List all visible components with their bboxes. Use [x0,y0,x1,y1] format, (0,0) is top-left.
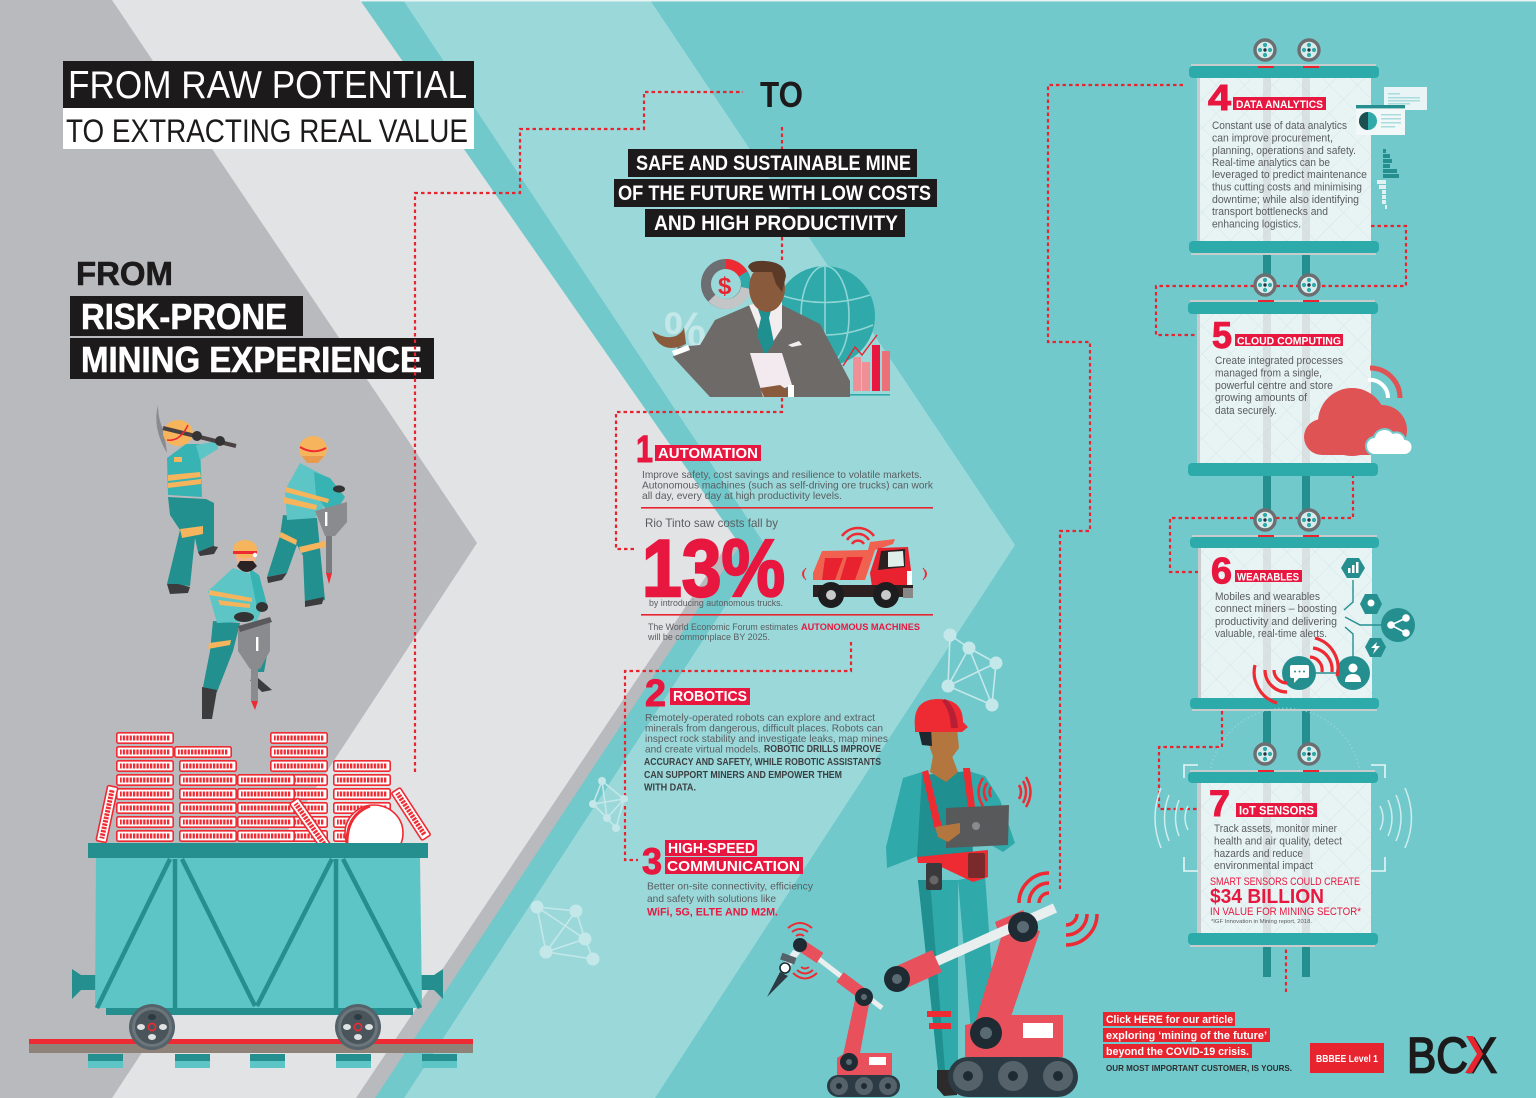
panel 4: data analytics: thus cutting costs and minimising [1212,182,1362,194]
heading: to: TO [760,74,803,115]
section 2: robotics [644,673,888,794]
globe [775,266,875,366]
icon: connected wearables network [1254,558,1415,703]
rail [29,1039,473,1068]
ingot pile [96,733,431,861]
heading: from risk-prone mining experience [70,255,434,380]
badge: BBBEE level 1 [1310,1043,1384,1073]
section 2: robotics: inspect rock stability and investigate leaks, map mines [645,733,888,745]
footer: article link: beyond the COVID-19 crisis. [1106,1046,1249,1058]
section 1: automation: by introducing autonomous trucks. [649,598,783,608]
footer: article link: OUR MOST IMPORTANT CUSTOMER, IS YOURS. [1106,1063,1292,1073]
icon: miner with jackhammer, back [267,436,347,607]
section 2: robotics: Remotely-operated robots can explore and extract [645,712,875,724]
panel 4: data analytics: planning, operations and safety. [1212,145,1356,157]
heading: from risk-prone mining experience: FROM [76,255,173,292]
panel 4: data analytics: enhancing logistics. [1212,218,1301,230]
panel 6: wearables: Mobiles and wearables [1215,591,1320,603]
heading: safe and sustainable mine of the future: SAFE AND SUSTAINABLE MINE [636,152,911,175]
donut chart: $ [718,273,732,300]
panel 7: IoT sensors: IN VALUE FOR MINING SECTOR* [1210,906,1362,918]
section 1: automation: Rio Tinto saw costs fall by [645,516,778,530]
section 2: robotics: and create virtual models. [645,744,761,756]
panel 5: cloud computing: growing amounts of [1215,392,1308,404]
title: from raw potential to extracting real value: TO EXTRACTING REAL VALUE [66,113,468,149]
icon: businessman with globe, chart and donut [652,261,890,397]
panel 5: cloud computing: data securely. [1215,405,1277,417]
icon: analytics cards and bars [1356,87,1427,209]
man [652,261,850,397]
icon: miner with pickaxe [156,405,236,594]
panel 4: data analytics: leveraged to predict maintenance [1212,169,1367,181]
ore wagon with ingots [29,733,473,1068]
section 3: high-speed communication: COMMUNICATION [667,858,800,875]
wagon wheels [129,1004,381,1050]
badge: BBBEE level 1: BBBEE Level 1 [1316,1054,1378,1065]
section 2: robotics: CAN SUPPORT MINERS AND EMPOWER THEM [644,769,842,781]
icon: autonomous dump truck [802,528,926,608]
dashed connector lines [415,85,1406,995]
panel 5: cloud computing: 5 [1212,315,1232,356]
panel 7: IoT sensors: SMART SENSORS COULD CREATE [1210,876,1360,888]
section 1: automation: will be commonplace BY 2025. [647,632,770,643]
panel 6: wearables [1190,535,1415,711]
panel 7: IoT sensors: Track assets, monitor miner [1214,823,1337,835]
section 1: automation: 1 [636,429,653,471]
section 2: robotics: ROBOTIC DRILLS IMPROVE [764,743,881,755]
panel 7: IoT sensors: IoT SENSORS [1239,804,1314,818]
icon: engineer with tablet [886,699,1037,1096]
footer: article link: Click HERE for our article [1106,1014,1233,1026]
section 3: high-speed communication [642,840,814,918]
section 1: automation: AUTOMATION [658,445,758,462]
wagon body [72,843,443,1015]
icon: sensor brackets and waves [1155,765,1412,871]
section 1: automation: 13% [642,524,785,614]
section 2: robotics: ROBOTICS [673,688,747,705]
section 3: high-speed communication: and safety with solutions like [647,893,776,905]
panel 6: wearables: WEARABLES [1237,572,1299,584]
bar chart [842,335,890,396]
section 2: robotics: minerals from dangerous, difficult places. Robots can [645,722,883,734]
panel 5: cloud computing: powerful centre and store [1215,380,1333,392]
panel 6: wearables: productivity and delivering [1215,616,1337,628]
panel 7: IoT sensors: 7 [1209,783,1230,824]
section 3: high-speed communication: HIGH-SPEED [668,840,755,857]
section 3: high-speed communication: 3 [642,841,662,882]
heading: from risk-prone mining experience: RISK-PRONE [81,296,287,337]
footer: article link [1103,1012,1292,1073]
panel 6: wearables: valuable, real-time alerts. [1215,628,1327,640]
logo: BCX: BCX [1407,1028,1497,1084]
panel 7: IoT sensors: *IGF Innovation in Mining report, 2018. [1211,919,1312,925]
section 1: automation: The World Economic Forum estimates [648,622,798,633]
section 3: high-speed communication: Better on-site connectivity, efficiency [647,880,814,892]
pipes and rollers column [1255,40,1319,977]
decorative network nodes [530,628,1002,966]
panel 5: cloud computing: Create integrated processes [1215,355,1343,367]
icon: small robot arm with drill [767,923,900,1097]
panel 4: data analytics: Real-time analytics can be [1212,157,1330,169]
footer: article link: exploring ‘mining of the future’ [1106,1030,1267,1042]
section 2: robotics: 2 [645,673,666,715]
section 2: robotics: ACCURACY AND SAFETY, WHILE ROBOTIC ASSISTANTS [644,756,881,768]
section 1: automation: Improve safety, cost savings and resilience to volatile markets. [642,469,922,481]
heading: safe and sustainable mine of the future: AND HIGH PRODUCTIVITY [654,212,898,235]
panel 4: data analytics: 4 [1208,77,1231,118]
heading: from risk-prone mining experience: MINING EXPERIENCE [81,339,422,380]
panel 5: cloud computing: managed from a single, [1215,368,1322,380]
title: from raw potential to extracting real value [63,61,474,149]
section 1: automation: all day, every day at high productivity levels. [642,490,842,502]
panel 4: data analytics: transport bottlenecks and [1212,206,1328,218]
panel 7: IoT sensors: environmental impact [1214,860,1313,872]
donut chart [706,264,746,304]
section 1: automation [636,429,934,643]
section 2: robotics: WITH DATA. [644,782,696,794]
panel 7: IoT sensors: hazards and reduce [1214,848,1303,860]
panel 6: wearables: 6 [1211,550,1232,592]
panel 4: data analytics: Constant use of data analytics [1212,120,1347,132]
section 3: high-speed communication: WiFi, 5G, ELTE AND M2M. [647,906,778,918]
heading: safe and sustainable mine of the future [614,149,937,237]
section 1: automation: Autonomous machines (such as self-driving ore trucks) can work [642,480,934,492]
panel 4: data analytics: can improve procurement, [1212,132,1333,144]
panel 4: data analytics: DATA ANALYTICS [1236,99,1323,111]
icon: cloud [1304,368,1413,456]
panel 7: IoT sensors: $34 BILLION [1210,886,1324,908]
percent sign: % [664,302,706,358]
section 1: automation: AUTONOMOUS MACHINES [801,622,920,633]
panel 5: cloud computing: CLOUD COMPUTING [1237,336,1341,348]
panel 7: IoT sensors: health and air quality, detect [1214,836,1342,848]
panel 6: wearables: connect miners – boosting [1215,603,1337,615]
panel 4: data analytics: downtime; while also identifying [1212,194,1359,206]
heading: safe and sustainable mine of the future: OF THE FUTURE WITH LOW COSTS [618,182,931,205]
title: from raw potential to extracting real value: FROM RAW POTENTIAL [68,64,467,107]
panel 4: data analytics [1189,64,1427,255]
icon: large robot arm [884,873,1097,1097]
panel 5: cloud computing [1188,300,1413,476]
panel 7: IoT sensors [1155,708,1412,947]
icon: miner with jackhammer, front [202,540,272,719]
